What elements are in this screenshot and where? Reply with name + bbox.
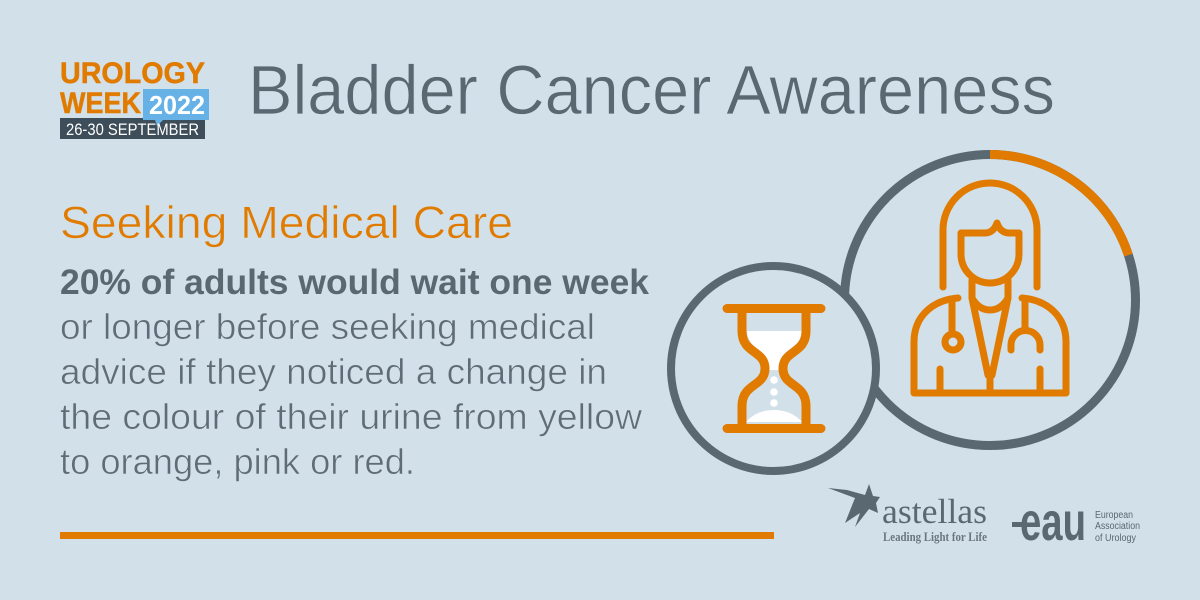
body text	[60, 263, 650, 482]
logo: astellas: astellas	[882, 492, 987, 531]
logo: Urology Week 2022: UROLOGY	[60, 57, 205, 90]
logo: European Association of Urology: of Urology	[1095, 533, 1136, 544]
divider rule	[60, 532, 774, 539]
subheading: Seeking Medical Care	[60, 197, 513, 248]
body text: or longer before seeking medical	[60, 306, 595, 347]
large donut ring: 20%	[844, 154, 1136, 446]
body text: advice if they noticed a change in	[60, 351, 607, 392]
logo: European Association of Urology: Association	[1095, 521, 1140, 532]
logo: European Association of Urology: eau	[1020, 492, 1086, 552]
logo: Urology Week 2022: 26-30 SEPTEMBER	[66, 120, 199, 139]
title: Bladder Cancer Awareness	[248, 51, 1055, 129]
logo: European Association of Urology: European	[1095, 510, 1133, 521]
icon: doctor	[914, 183, 1066, 393]
icon: hourglass	[727, 308, 821, 428]
small ring	[671, 266, 876, 471]
logo: astellas: Leading Light for Life	[883, 530, 987, 544]
logo: Urology Week 2022: WEEK	[60, 87, 141, 120]
logo: astellas	[828, 484, 987, 544]
body text: to orange, pink or red.	[60, 441, 415, 482]
logo: Urology Week 2022	[60, 57, 209, 139]
logo: Urology Week 2022: 2022	[149, 90, 205, 120]
body text: 20% of adults would wait one week	[60, 263, 650, 302]
body text: the colour of their urine from yellow	[60, 396, 643, 437]
